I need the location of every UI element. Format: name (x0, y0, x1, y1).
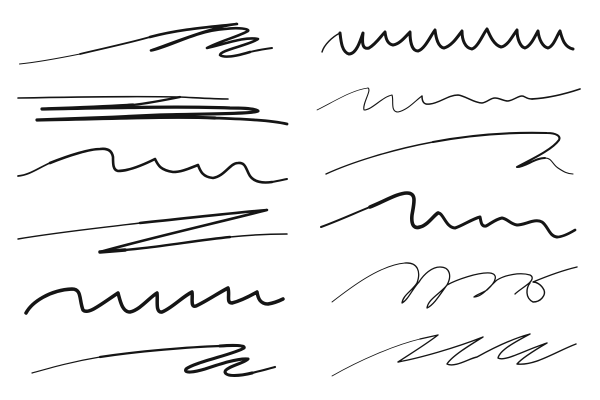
stroke 11: cursive loops (332, 263, 577, 308)
stroke 5: thick wave (26, 288, 283, 313)
stroke 2: stacked horizontal scribble (18, 97, 287, 124)
stroke 9: arc with hook (326, 133, 573, 174)
stroke 6: line with zigzag tail (32, 345, 275, 376)
stroke 1: rising line with zigzag end (20, 24, 272, 64)
stroke 12: thin zigzag tail (332, 334, 576, 376)
stroke 7: looped wave (322, 29, 573, 54)
stroke 8: thin small wave (317, 88, 580, 112)
stroke 3: wave line (18, 149, 287, 182)
stroke 4: z-shaped zigzag (18, 210, 287, 252)
stroke 10: thick tapered wave (321, 193, 575, 237)
